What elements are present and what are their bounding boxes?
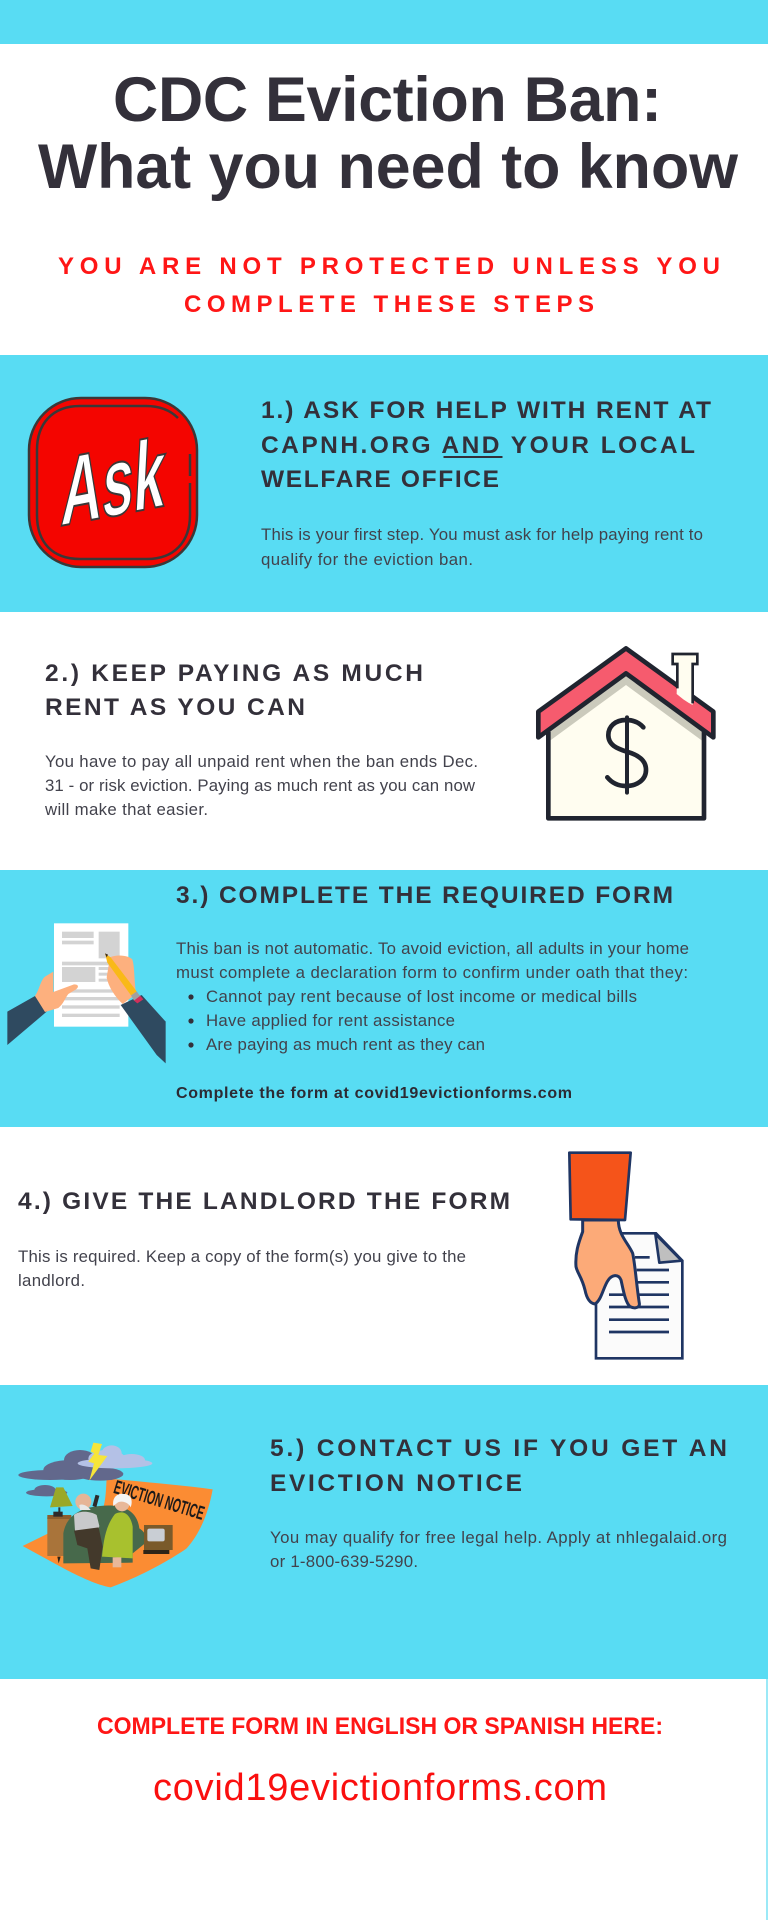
text: step 1 body: This is your first step. You must ask for help paying rent to [261,525,703,544]
icon: ask button: Ask [59,418,169,548]
text: step 3 body: must complete a declaration form to confirm under oath that they: [176,963,688,982]
panel: step 5 eviction notice [0,1385,768,1679]
text: step 4 body: landlord. [18,1271,85,1290]
heading: step 4: 4.) GIVE THE LANDLORD THE FORM [18,1188,510,1215]
heading: footer call to action: COMPLETE FORM IN ENGLISH OR SPANISH HERE: [97,1713,663,1740]
title: CDC Eviction Ban: [113,65,662,135]
heading: step 1: WELFARE OFFICE [261,466,499,493]
icon: ask button [29,398,197,567]
heading: step 1 [261,397,711,493]
heading: step 1: 1.) ASK FOR HELP WITH RENT AT [261,397,711,424]
text: step 2 body: You have to pay all unpaid rent when the ban ends Dec. [45,752,478,771]
heading: step 5: 5.) CONTACT US IF YOU GET AN [270,1435,727,1462]
icon: hand holding document [569,1153,682,1358]
heading: step 5: EVICTION NOTICE [270,1470,522,1497]
panel: footer link [0,1679,768,1920]
icon: elderly couple on eviction notice [18,1443,213,1587]
text: form website callout: Complete the form at covid19evictionforms.com [176,1085,572,1102]
text: step 4 body: This is required. Keep a copy of the form(s) you give to the [18,1247,466,1266]
heading: step 5 [270,1435,727,1497]
panel: step 4 give landlord the form [0,1127,768,1385]
title [38,65,738,202]
panel: step 2 keep paying [0,612,768,870]
text: step 1 body: qualify for the eviction ban. [261,550,473,569]
text: step 5 body [270,1528,727,1571]
subtitle warning [58,253,720,318]
heading: step 2: RENT AS YOU CAN [45,694,305,721]
text: step 2 body [44,752,478,819]
text: step 5 body: or 1-800-639-5290. [270,1552,418,1571]
subtitle warning: COMPLETE THESE STEPS [184,291,594,318]
icon: house with dollar sign [538,648,713,818]
text: step 4 body [18,1247,466,1290]
text: footer website: covid19evictionforms.com [153,1767,607,1809]
panel: step 3 complete form [0,870,768,1127]
heading: step 2 [45,660,423,721]
icon: elderly couple on eviction notice: EVICTION NOTICE [111,1477,207,1525]
list: eligibility conditions: Are paying as much rent as they can [206,1035,485,1054]
panel: step 1 ask for help [0,355,768,612]
text: step 1 body [261,525,703,569]
text: step 5 body: You may qualify for free legal help. Apply at nhlegalaid.org [270,1528,727,1547]
text: step 3 body [176,939,689,982]
title: What you need to know [38,132,738,202]
heading: step 1: CAPNH.ORG AND YOUR LOCAL [261,432,695,459]
heading: step 2: 2.) KEEP PAYING AS MUCH [45,660,423,687]
list: eligibility conditions: Cannot pay rent because of lost income or medical bills [206,987,637,1006]
heading: step 3: 3.) COMPLETE THE REQUIRED FORM [176,882,673,909]
list: eligibility conditions [188,987,637,1054]
top band [0,0,768,44]
subtitle warning: YOU ARE NOT PROTECTED UNLESS YOU [58,253,720,280]
text: step 2 body: will make that easier. [44,800,208,819]
icon: hands filling out a form [7,923,166,1063]
text: step 3 body: This ban is not automatic. To avoid eviction, all adults in your home [176,939,689,958]
text: step 2 body: 31 - or risk eviction. Paying as much rent as you can now [45,776,476,795]
list: eligibility conditions: Have applied for rent assistance [206,1011,455,1030]
